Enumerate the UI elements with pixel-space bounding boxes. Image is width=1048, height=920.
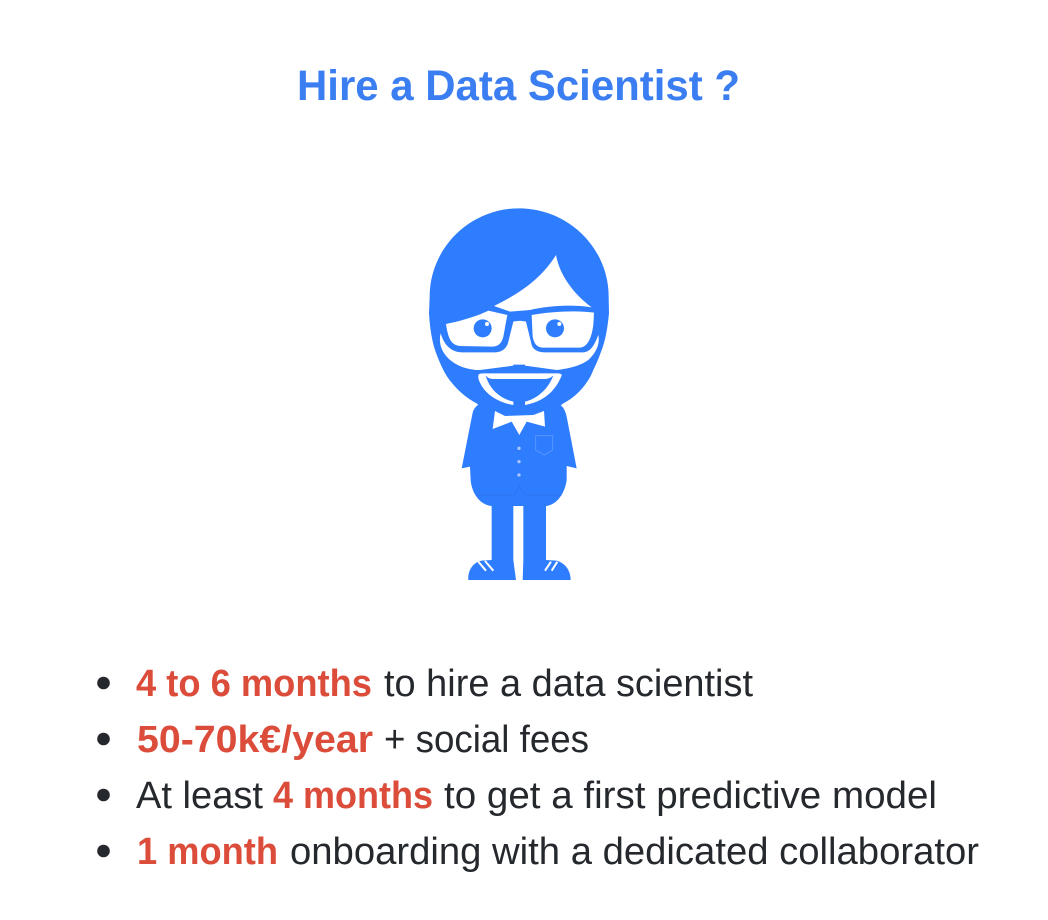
left eye bbox=[474, 319, 492, 337]
jacket hem bbox=[477, 486, 562, 495]
left lens bbox=[446, 311, 507, 347]
bullet 4: 1 month bbox=[137, 831, 278, 873]
bullet 1: 4 to 6 months bbox=[136, 663, 372, 705]
jacket and legs bbox=[462, 403, 577, 580]
bullet 3: to get a first predictive model bbox=[444, 775, 937, 817]
right lens bbox=[532, 311, 594, 348]
pocket bbox=[536, 436, 553, 455]
bullet 4: onboarding with a dedicated collaborator bbox=[290, 831, 979, 873]
title: Hire a Data Scientist ? bbox=[297, 62, 740, 110]
bullet 1: to hire a data scientist bbox=[384, 663, 753, 705]
bullet 1 bbox=[97, 663, 753, 705]
jacket buttons bbox=[517, 447, 521, 477]
bullet 3 bbox=[97, 775, 937, 817]
smile bbox=[478, 373, 562, 405]
bow tie and collar bbox=[493, 411, 545, 435]
icon: data scientist character bbox=[429, 208, 609, 580]
bullet 2: + social fees bbox=[384, 719, 589, 761]
shoe stripes bbox=[478, 561, 557, 571]
right eye bbox=[546, 319, 564, 337]
bullet 3: 4 months bbox=[273, 775, 433, 817]
forehead bbox=[494, 255, 592, 312]
head and face bbox=[429, 208, 609, 408]
bullet 2 bbox=[97, 719, 589, 761]
bullet list bbox=[97, 663, 979, 873]
bullet 3: At least bbox=[136, 775, 263, 817]
bullet 2: 50-70k€/year bbox=[137, 719, 373, 761]
head and hair bbox=[429, 208, 609, 408]
nose and moustache bbox=[440, 321, 599, 370]
